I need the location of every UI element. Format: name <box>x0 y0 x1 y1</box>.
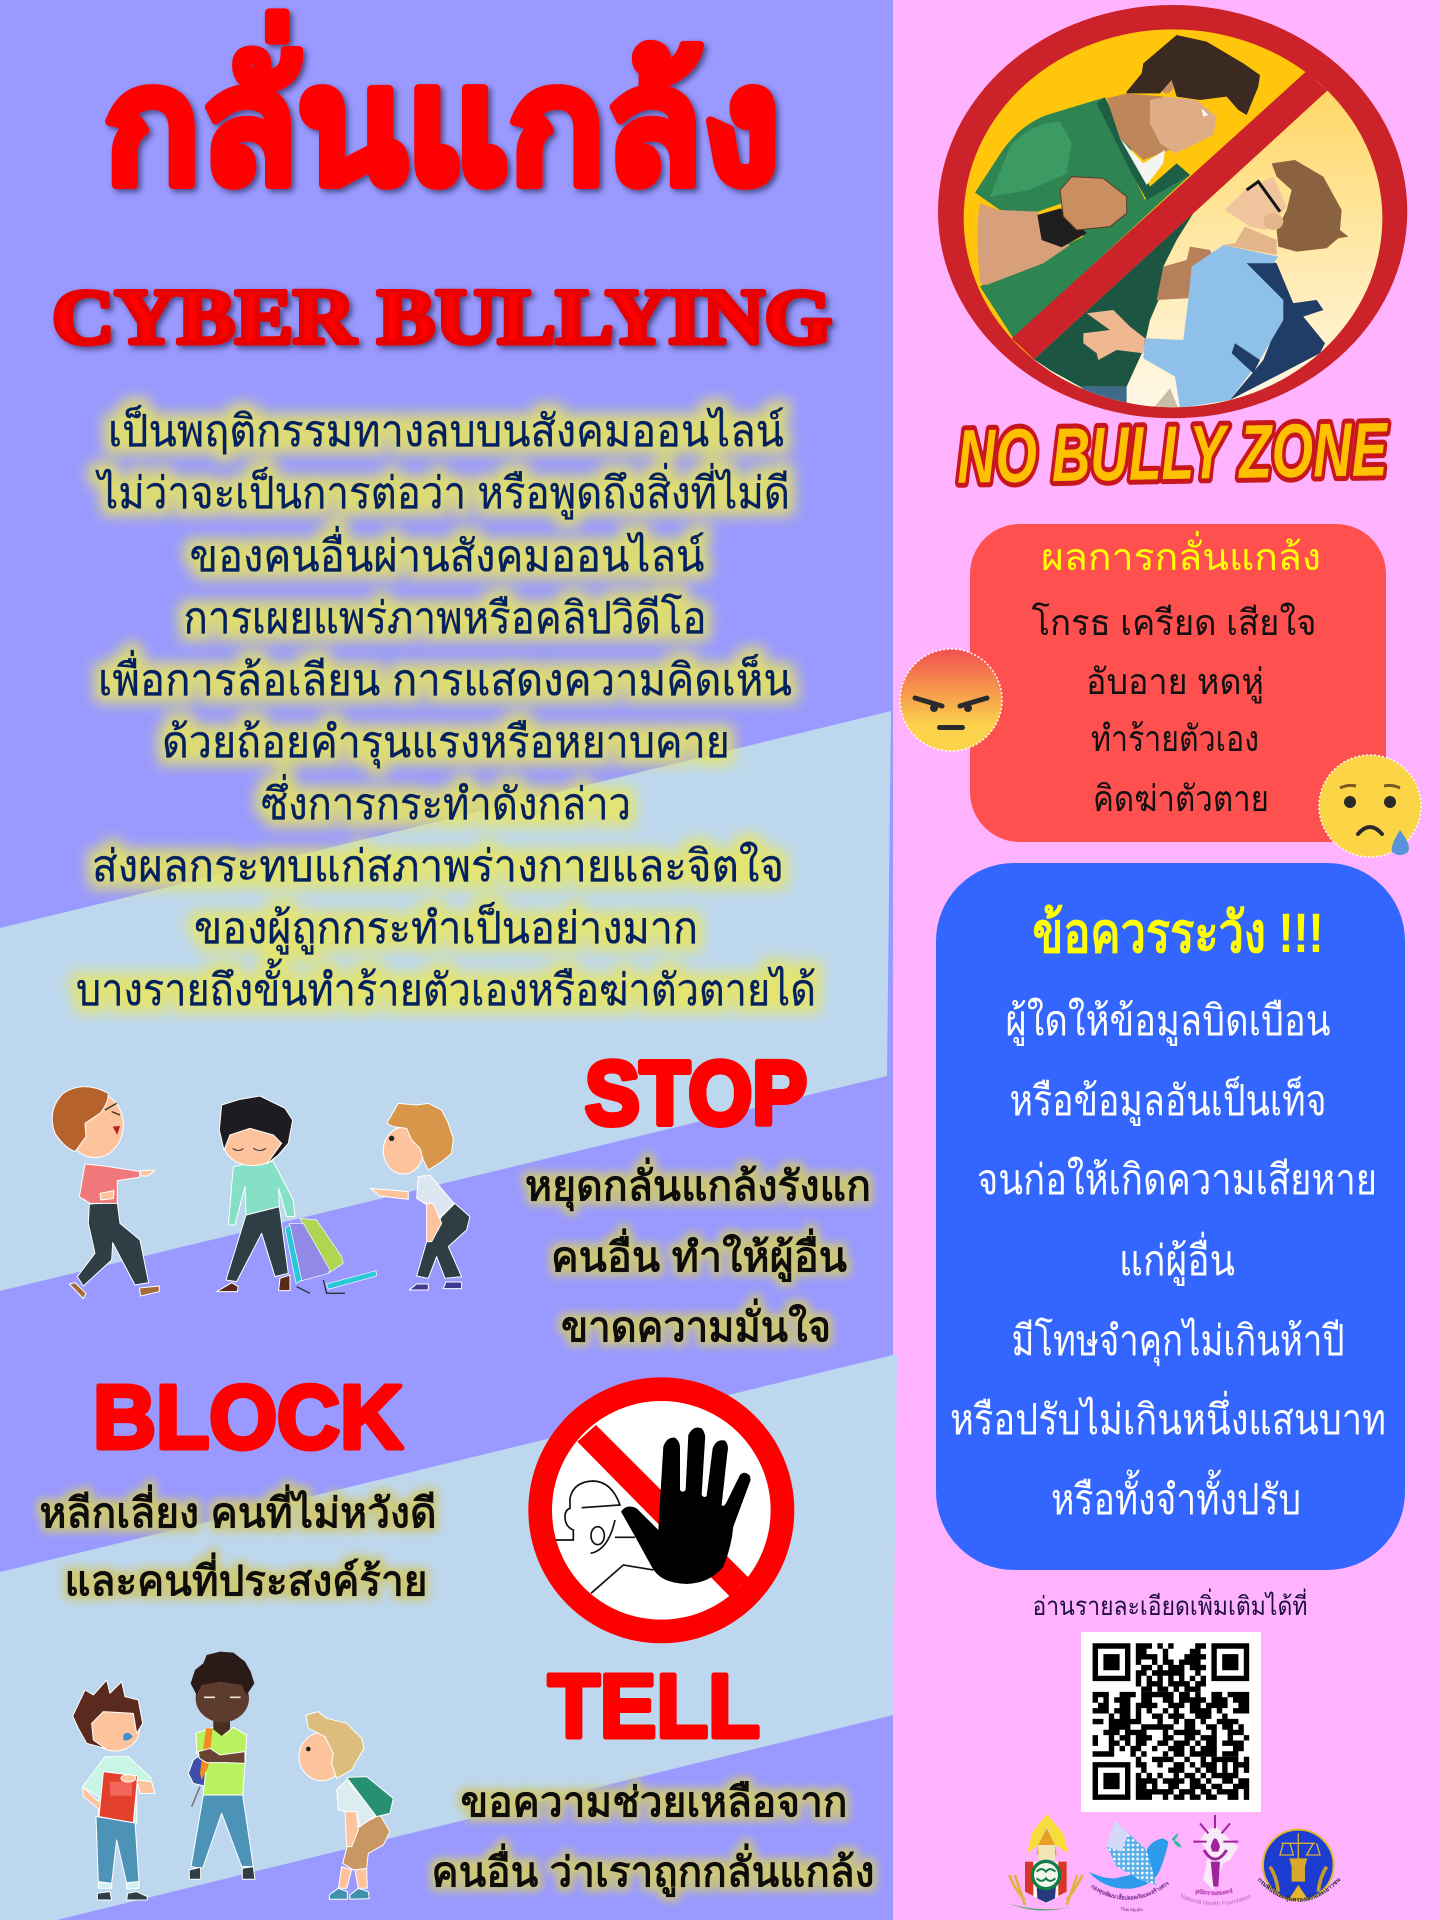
text block: tell description: คนอื่น ว่าเราถูกกลั่นแกล้ง <box>432 1843 874 1898</box>
text block: definition of cyber bullying: การเผยแพร่ภาพหรือคลิปวิดีโอ <box>184 593 706 643</box>
prohibition slash <box>1012 72 1327 359</box>
figure: bully in green shirt <box>975 35 1260 338</box>
QR code <box>1081 1632 1261 1812</box>
logo: Department of Juvenile Observation seal: กรมพินิจและคุ้มครองเด็กและเยาวชน <box>1258 1878 1340 1902</box>
illustration: no bully zone prohibition sign <box>938 5 1407 418</box>
list of effects: อับอาย หดหู่ <box>1086 661 1264 704</box>
panel: effects of bullying <box>970 524 1386 842</box>
partner logos row <box>1008 1814 1340 1912</box>
label: TELL: TELL <box>548 1657 760 1757</box>
text block: definition of cyber bullying: ด้วยถ้อยคำรุนแรงหรือหยาบคาย <box>162 718 730 769</box>
list of effects <box>1032 602 1316 819</box>
title: Thai word for bullying: กลั่นแกล้ง <box>104 12 780 217</box>
cartoon scene <box>960 27 1387 410</box>
icon: crying emoji <box>1319 755 1421 857</box>
text block: stop description: ขาดความมั่นใจ <box>561 1298 831 1350</box>
text block: stop description: คนอื่น ทำให้ผู้อื่น <box>551 1228 847 1283</box>
text block: block description <box>40 1484 436 1604</box>
illustration: three children bullying scene <box>52 1087 470 1299</box>
figure: victim boy in blue shirt <box>1083 160 1348 408</box>
warning text <box>950 997 1386 1523</box>
text block: block description: หลีกเลี่ยง คนที่ไม่หวังดี <box>40 1484 436 1536</box>
logo: National Health Foundation: มูลนิธิสาธารณสุขแห่งชาติ <box>1195 1888 1233 1897</box>
logo: Thai Media Fund dove: กองทุนพัฒนาสื่อปลอดภัยและสร้างสรรค์ <box>1090 1882 1169 1900</box>
left purple background panel <box>0 0 897 1920</box>
figure: laughing boy pointing <box>52 1087 159 1299</box>
list of effects: โกรธ เครียด เสียใจ <box>1032 602 1316 643</box>
logo: royal emblem with green roundel <box>1008 1814 1085 1910</box>
heading: warning: ข้อควรระวัง !!! <box>1032 901 1324 964</box>
logo: Thai Media Fund dove <box>1088 1820 1182 1912</box>
warning text: หรือข้อมูลอันเป็นเท็จ <box>1010 1076 1326 1126</box>
figure: curly-haired boy pointing <box>371 1103 470 1290</box>
label: STOP: STOP <box>585 1044 807 1144</box>
icon: no-entry sign with raised hand <box>528 1377 794 1643</box>
logo: National Health Foundation: National Health Foundation <box>1180 1894 1251 1906</box>
text block: block description: และคนที่ประสงค์ร้าย <box>64 1552 428 1604</box>
icon: angry emoji <box>900 649 1002 751</box>
warning text: หรือทั้งจำทั้งปรับ <box>1051 1469 1301 1523</box>
illustration: three children asking for help <box>73 1652 393 1900</box>
text block: definition of cyber bullying <box>76 405 816 1015</box>
logo: National Health Foundation <box>1180 1815 1251 1906</box>
list of effects: คิดฆ่าตัวตาย <box>1093 778 1269 819</box>
warning text: แก่ผู้อื่น <box>1119 1232 1235 1286</box>
text block: definition of cyber bullying: ไม่ว่าจะเป็นการต่อว่า หรือพูดถึงสิ่งที่ไม่ดี <box>95 462 790 520</box>
text block: stop description: หยุดกลั่นแกล้งรังแก <box>525 1157 871 1212</box>
figure: fallen backpack <box>285 1218 377 1293</box>
figure: blond boy with green backpack <box>299 1712 393 1899</box>
text block: definition of cyber bullying: ส่งผลกระทบแก่สภาพร่างกายและจิตใจ <box>92 841 784 891</box>
text block: definition of cyber bullying: ของผู้ถูกกระทำเป็นอย่างมาก <box>194 902 698 955</box>
figure: bully lower body and arm <box>1034 213 1213 405</box>
text block: definition of cyber bullying: ของคนอื่นผ่านสังคมออนไลน์ <box>190 525 704 581</box>
ring background <box>938 5 1407 418</box>
warning text: หรือปรับไม่เกินหนึ่งแสนบาท <box>950 1391 1386 1443</box>
text block: definition of cyber bullying: ซึ่งการกระทำดังกล่าว <box>261 773 631 829</box>
panel: warning about false information <box>936 863 1405 1570</box>
heading: effects: ผลการกลั่นแกล้ง <box>1041 531 1321 579</box>
caption: read more at: อ่านรายละเอียดเพิ่มเติมได้ที่ <box>1032 1588 1308 1621</box>
warning text: มีโทษจำคุกไม่เกินห้าปี <box>1012 1316 1344 1367</box>
figure: crying boy with red book <box>73 1680 155 1900</box>
text block: tell description: ขอความช่วยเหลือจาก <box>460 1779 848 1825</box>
figure: boy with crossed arms <box>188 1652 255 1879</box>
figure: sad boy dragging backpack <box>217 1096 295 1292</box>
list of effects: ทำร้ายตัวเอง <box>1091 718 1259 759</box>
label: BLOCK: BLOCK <box>93 1368 403 1468</box>
logo: Department of Juvenile Observation seal <box>1258 1828 1340 1902</box>
warning text: ผู้ใดให้ข้อมูลบิดเบือน <box>1006 997 1330 1046</box>
text block: definition of cyber bullying: บางรายถึงขั้นทำร้ายตัวเองหรือฆ่าตัวตายได้ <box>76 958 816 1015</box>
logo: Thai Media Fund dove: Thai Media Fund <box>1120 1906 1143 1912</box>
heading: CYBER BULLYING: CYBER BULLYING <box>52 273 832 360</box>
warning text: จนก่อให้เกิดความเสียหาย <box>977 1156 1377 1203</box>
text block: stop description <box>525 1157 871 1350</box>
text block: definition of cyber bullying: เป็นพฤติกรรมทางลบบนสังคมออนไลน์ <box>108 405 784 456</box>
text block: definition of cyber bullying: เพื่อการล้อเลียน การแสดงความคิดเห็น <box>98 649 792 705</box>
text block: tell description <box>432 1779 874 1898</box>
